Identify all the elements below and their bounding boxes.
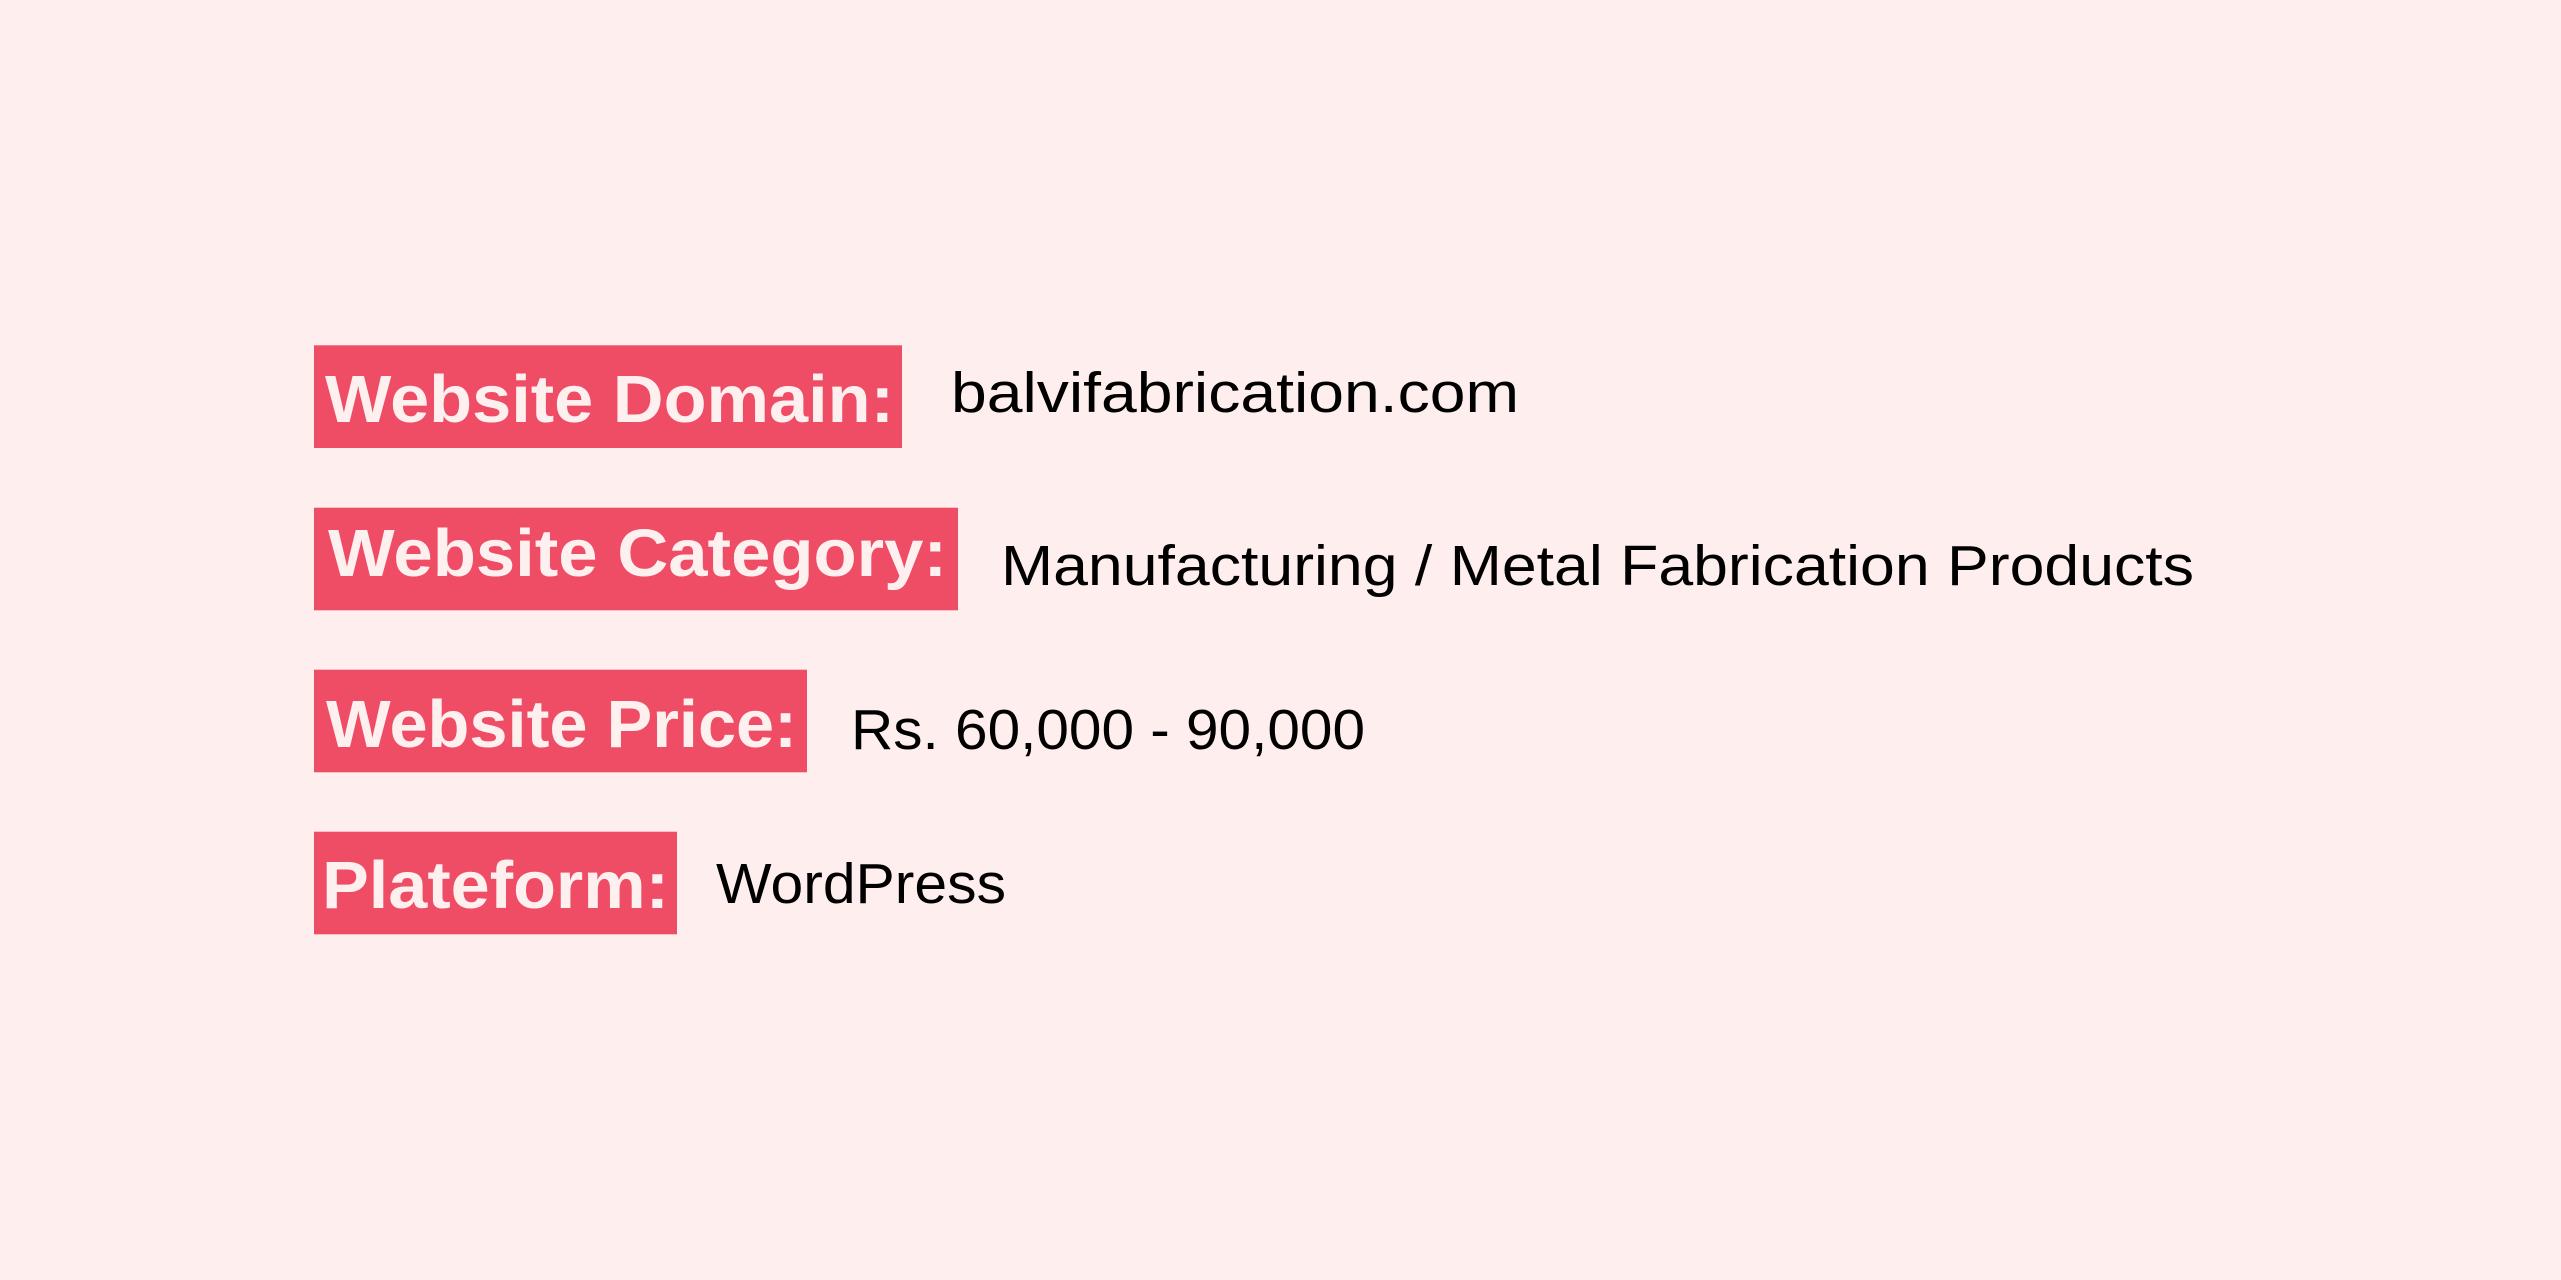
label: platform — [314, 832, 677, 934]
row: platform — [314, 832, 1006, 934]
label: website price: Website Price: — [326, 687, 797, 762]
value: price: Rs. 60,000 - 90,000 — [851, 698, 1365, 762]
label: website domain: Website Domain: — [325, 362, 894, 437]
label: platform: Plateform: — [322, 848, 669, 923]
value: platform: WordPress — [716, 852, 1006, 916]
label: website price — [314, 670, 807, 772]
label: website category — [314, 508, 958, 610]
value: domain: balvifabrication.com — [951, 361, 1519, 425]
row: website category — [314, 508, 2194, 610]
label: website category: Website Category: — [328, 516, 947, 591]
label: website domain — [314, 345, 902, 448]
value: category: Manufacturing / Metal Fabrication Products — [1001, 534, 2194, 598]
row: website domain — [314, 345, 1519, 448]
row: website price — [314, 670, 1365, 772]
